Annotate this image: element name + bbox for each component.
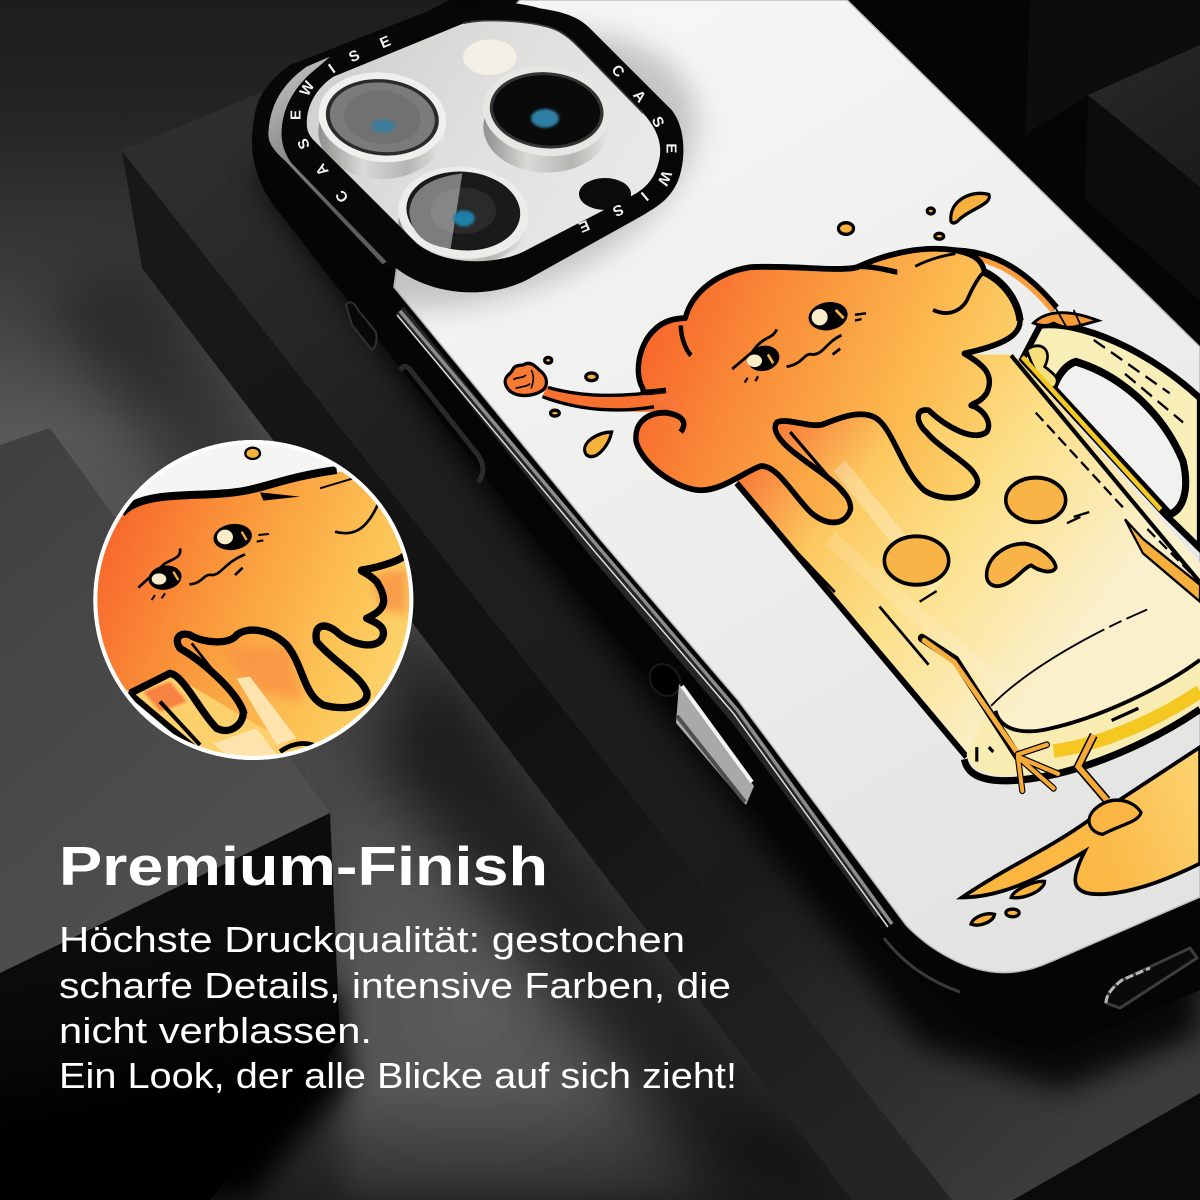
right arm reaching to handle bbox=[955, 252, 1056, 308]
phone case body bbox=[252, 0, 1200, 1050]
flash bbox=[463, 39, 517, 76]
camera module bbox=[253, 0, 683, 292]
bottom port bbox=[1106, 948, 1197, 1008]
lens: main bbox=[479, 61, 614, 173]
ring lettering: E bbox=[576, 216, 592, 236]
foam and arm blend bbox=[652, 392, 677, 406]
bumper highlights bbox=[397, 310, 960, 992]
ring lettering: E bbox=[662, 143, 679, 153]
clear case strip bbox=[268, 57, 387, 264]
foot bbox=[1089, 800, 1141, 834]
top right dark backdrop bbox=[847, 0, 1200, 420]
foam bbox=[636, 249, 1020, 522]
ring lettering: S bbox=[610, 200, 626, 220]
ring lettering: I bbox=[326, 61, 339, 77]
inset foam mouth bbox=[189, 554, 245, 584]
leg bbox=[1078, 735, 1107, 800]
body copy: Ein Look, der alle Blicke auf sich zieht! bbox=[59, 1055, 737, 1096]
ring lettering: C bbox=[332, 187, 352, 206]
glass eye left bbox=[884, 536, 949, 585]
phone corner black bbox=[253, 0, 483, 270]
inset foam top line bbox=[122, 470, 337, 513]
right eye bbox=[808, 302, 866, 330]
block: left front face bbox=[0, 813, 340, 1200]
phone shadow bbox=[250, 170, 1200, 1090]
platform: side face bbox=[122, 151, 952, 1200]
ring lettering: A bbox=[629, 87, 649, 106]
ring lettering: W bbox=[653, 168, 675, 189]
fist bbox=[505, 363, 546, 396]
side button recess bbox=[643, 658, 687, 702]
right arm on glass bbox=[1125, 519, 1200, 602]
lower arm with fingers bbox=[922, 638, 1058, 791]
lens: tele bbox=[394, 161, 532, 265]
glass eye right bbox=[1006, 478, 1066, 522]
inset drips bbox=[130, 555, 405, 730]
lens: ultra wide bbox=[314, 66, 451, 179]
drops bbox=[545, 193, 1045, 925]
puddle bbox=[962, 747, 1200, 897]
camera ring shadow bbox=[394, 18, 709, 322]
mug glass bbox=[737, 355, 1200, 776]
block: top right bbox=[1088, 45, 1200, 187]
illustration: sad beer mug bbox=[505, 193, 1200, 925]
inset: magnified detail circle bbox=[90, 435, 420, 765]
body copy: scharfe Details, intensive Farben, die bbox=[59, 965, 731, 1006]
hand on handle bbox=[1033, 308, 1098, 328]
camera ring bbox=[282, 2, 683, 292]
inset right eye bbox=[214, 524, 270, 550]
side button silver bbox=[676, 684, 754, 805]
sensor hole bbox=[579, 178, 631, 210]
ring lettering: A bbox=[312, 160, 332, 179]
block: left top surface bbox=[0, 428, 330, 973]
ring lettering: S bbox=[648, 114, 667, 130]
ring lettering: C bbox=[608, 62, 628, 81]
inset left eye bbox=[138, 548, 183, 600]
side button slot bbox=[400, 366, 483, 482]
left eye bbox=[732, 329, 781, 383]
ring lettering: S bbox=[346, 47, 362, 66]
mug base bbox=[964, 660, 1200, 781]
printed screen surface bbox=[394, 0, 1200, 973]
foam mouth bbox=[787, 335, 842, 367]
glass mouth bbox=[987, 544, 1056, 586]
body copy bbox=[59, 919, 737, 1096]
ring lettering bbox=[287, 33, 679, 236]
block: soft contact shadow bbox=[0, 990, 348, 1200]
ring lettering: S bbox=[294, 136, 314, 152]
mug handle bbox=[1022, 325, 1200, 548]
foam highlights and ink lines bbox=[667, 254, 1020, 500]
camera island fill bbox=[307, 21, 660, 261]
ring lettering: E bbox=[287, 110, 304, 120]
inset foam fill bbox=[90, 472, 420, 765]
body copy: nicht verblassen. bbox=[59, 1010, 372, 1051]
ring lettering: W bbox=[296, 78, 319, 99]
inset drop bbox=[245, 448, 260, 459]
glass tear marks bbox=[920, 512, 1089, 602]
ring lettering: I bbox=[637, 188, 652, 204]
body copy: Höchste Druckqualität: gestochen bbox=[59, 919, 685, 960]
side switch bbox=[346, 302, 376, 350]
heading: Premium-Finish bbox=[59, 835, 548, 897]
ring lettering: E bbox=[377, 33, 393, 52]
left arm bbox=[542, 386, 679, 412]
